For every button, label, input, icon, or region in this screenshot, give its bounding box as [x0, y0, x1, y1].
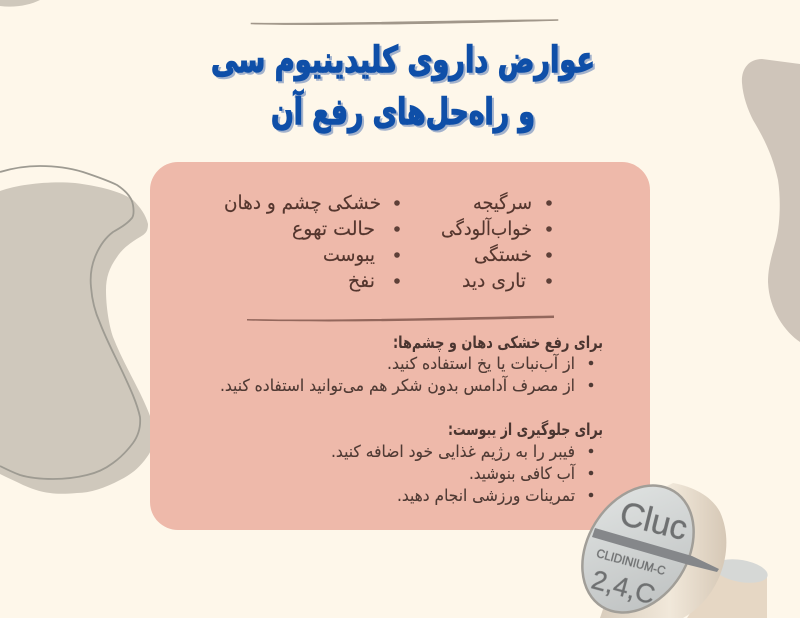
decorative blob: right [742, 59, 800, 342]
text block: dry mouth remedies: از آب‌نبات یا یخ استفاده کنید. [387, 354, 575, 374]
text block: dry mouth remedies [220, 333, 603, 396]
title [211, 40, 595, 133]
text block: constipation prevention: فیبر را به رژیم غذایی خود اضافه کنید. [331, 442, 575, 462]
text block: constipation prevention: آب کافی بنوشید. [469, 464, 576, 484]
decorative blob: top left [0, 0, 40, 7]
icon: clidinium pills: Cluc [616, 495, 691, 548]
list: side effects right column: خستگی [474, 243, 532, 266]
list: side effects left column: خشکی چشم و دهان [224, 192, 381, 214]
list: side effects right column: تاری دید [462, 270, 526, 292]
title: عوارض داروی کلیدینیوم سی [211, 40, 595, 81]
list: side effects left column [224, 192, 400, 292]
icon: clidinium pills [560, 465, 769, 618]
text block: dry mouth remedies: از مصرف آدامس بدون شکر هم می‌توانید استفاده کنید. [220, 376, 575, 396]
top divider line [251, 20, 558, 25]
text block: dry mouth remedies: برای رفع خشکی دهان و چشم‌ها: [393, 333, 603, 353]
panel: side effects and remedies [150, 162, 650, 530]
text block: constipation prevention: تمرینات ورزشی انجام دهید. [397, 486, 575, 506]
list: side effects right column [441, 191, 552, 292]
text block: constipation prevention: برای جلوگیری از یبوست: [448, 419, 603, 440]
icon: clidinium pills: 2,4,C [588, 564, 658, 610]
list: side effects right column: سرگیجه [473, 191, 532, 214]
decorative blob: left with outline [0, 166, 154, 494]
icon: clidinium pills: CLIDINIUM-C [595, 548, 667, 578]
list: side effects left column: حالت تهوع [292, 218, 375, 240]
list: side effects left column: نفخ [348, 270, 375, 292]
panel divider line [247, 316, 554, 321]
list: side effects right column: خواب‌آلودگی [441, 216, 532, 240]
text block: constipation prevention [331, 419, 603, 506]
title: و راه‌حل‌های رفع آن [271, 89, 535, 133]
list: side effects left column: یبوست [323, 244, 375, 266]
